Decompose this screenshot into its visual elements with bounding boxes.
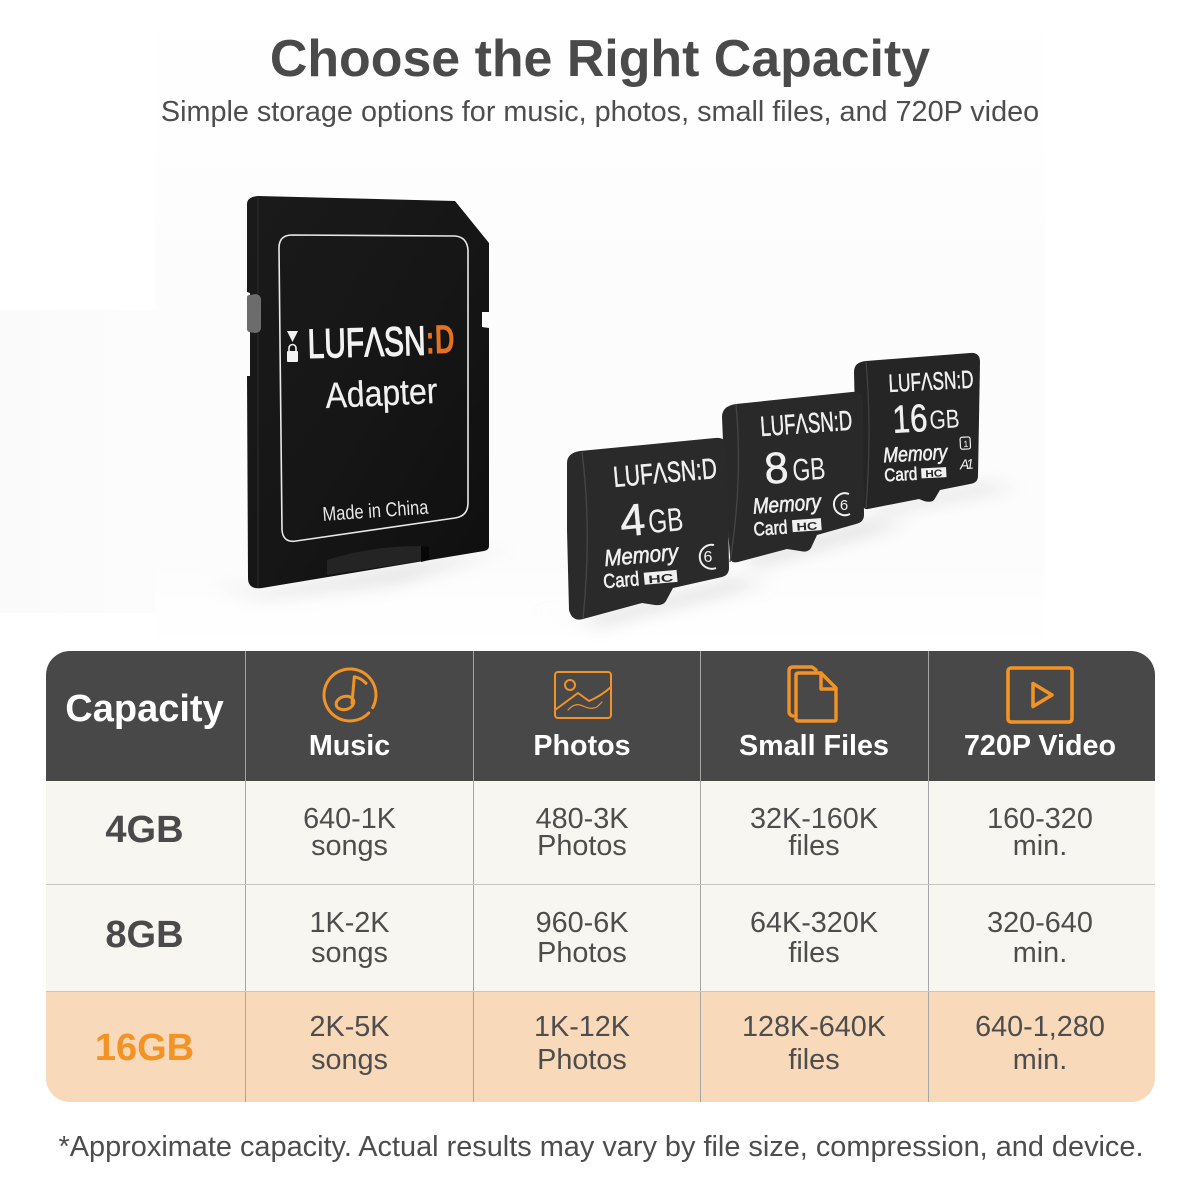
cell: 16GB files: files [788,1044,840,1076]
class 6 badge: 6 [704,549,713,566]
cell: 16GB photos [534,1011,630,1076]
cell: 8GB music: 1K-2K [309,907,390,939]
header: photos: Photos [533,730,631,762]
cell: 16GB music [309,1011,390,1076]
card: 8GB: Card [753,517,788,541]
row label: 4GB: 4GB [105,809,184,851]
card: 16GB: A1 [958,456,974,472]
cell: 16GB music: songs [311,1044,388,1076]
cell: 16GB video: 640-1,280 [975,1011,1105,1043]
card: 8GB: 8 [763,443,790,494]
title: Choose the Right Capacity [270,29,930,87]
cell: 8GB video: min. [1013,937,1067,969]
card shadows [530,485,1020,626]
cell: 4GB video: 160-320 [987,803,1093,835]
card: 4GB: Card [602,568,640,593]
cell: 16GB music: 2K-5K [309,1011,390,1043]
cell: 4GB music [303,803,396,862]
row label: 16GB: 16GB [95,1027,194,1069]
cell: 8GB music [309,907,390,969]
class 6 badge [700,545,716,569]
card: 8GB [722,392,864,562]
cell: 4GB music: 640-1K [303,803,396,835]
card: 16GB [854,353,980,509]
card: 8GB: HC [796,520,818,534]
cell: 4GB photos: Photos [537,830,627,862]
adapter card [247,196,489,588]
card: 4GB: GB [647,500,685,540]
card: 4GB: 4 [618,494,647,547]
row label: 8GB: 8GB [105,914,184,956]
card: 16GB: Memory [883,441,949,467]
cell: 16GB photos: Photos [537,1044,627,1076]
cell: 16GB video: min. [1013,1044,1067,1076]
cell: 4GB video [987,803,1093,862]
cell: 4GB files [750,803,878,862]
card: 16GB: 1 [963,439,969,449]
cell: 4GB music: songs [311,830,388,862]
adapter logo: LUFΛSN [307,318,426,367]
cell: 8GB files: 64K-320K [750,907,878,939]
footnote: *Approximate capacity. Actual results may vary by file size, compression, and device. [59,1131,1143,1163]
cell: 4GB photos: 480-3K [536,803,628,835]
icon: files [787,665,838,723]
photo: memory cards and adapter [247,196,1004,629]
card: 8GB: LUFΛSN:D [759,405,853,442]
cell: 16GB video [975,1011,1105,1076]
card: 4GB: Memory [603,539,680,571]
cell: 8GB photos: 960-6K [536,907,628,939]
class 6 badge [834,493,850,515]
card: 4GB [567,438,729,620]
table background [46,651,1155,1102]
cell: 4GB photos [536,803,628,862]
card: 16GB: Card [884,464,918,485]
class 6 badge: 6 [840,497,848,514]
icon: photo [554,671,612,719]
card: 16GB: HC [925,468,943,480]
card: 8GB: Memory [752,489,823,519]
card: 4GB: LUFΛSN:D [612,453,718,494]
adapter logo: :D [425,316,455,363]
header: music: Music [309,730,390,762]
card: 8GB: GB [791,451,827,488]
card: 16GB: GB [929,403,960,435]
card: 16GB: 16 [891,397,929,442]
cell: 8GB video [987,907,1093,969]
cell: 8GB music: songs [311,937,388,969]
header: 720p video: 720P Video [964,730,1116,762]
card: 4GB: HC [648,572,674,586]
icon: video [1006,666,1074,724]
made in china text: Made in China [322,497,430,526]
cell: 8GB photos: Photos [537,937,627,969]
cell: 16GB files [742,1011,886,1076]
cell: 8GB files [750,907,878,969]
subtitle: Simple storage options for music, photos, small files, and 720P video [161,96,1039,128]
adapter label frame [279,235,468,541]
cell: 4GB files: files [788,830,840,862]
icon: music note [322,668,378,722]
cell: 8GB video: 320-640 [987,907,1093,939]
adapter text: Adapter [325,370,438,416]
cell: 4GB video: min. [1013,830,1067,862]
cell: 8GB files: files [788,937,840,969]
header: capacity: Capacity [65,688,224,730]
adapter lock icon [287,331,298,362]
cell: 16GB files: 128K-640K [742,1011,886,1043]
cell: 16GB photos: 1K-12K [534,1011,630,1043]
card: 16GB: LUFΛSN:D [888,366,974,398]
header: small files: Small Files [739,730,889,762]
cell: 4GB files: 32K-160K [750,803,878,835]
adapter shadow [205,548,510,598]
cell: 8GB photos [536,907,628,969]
